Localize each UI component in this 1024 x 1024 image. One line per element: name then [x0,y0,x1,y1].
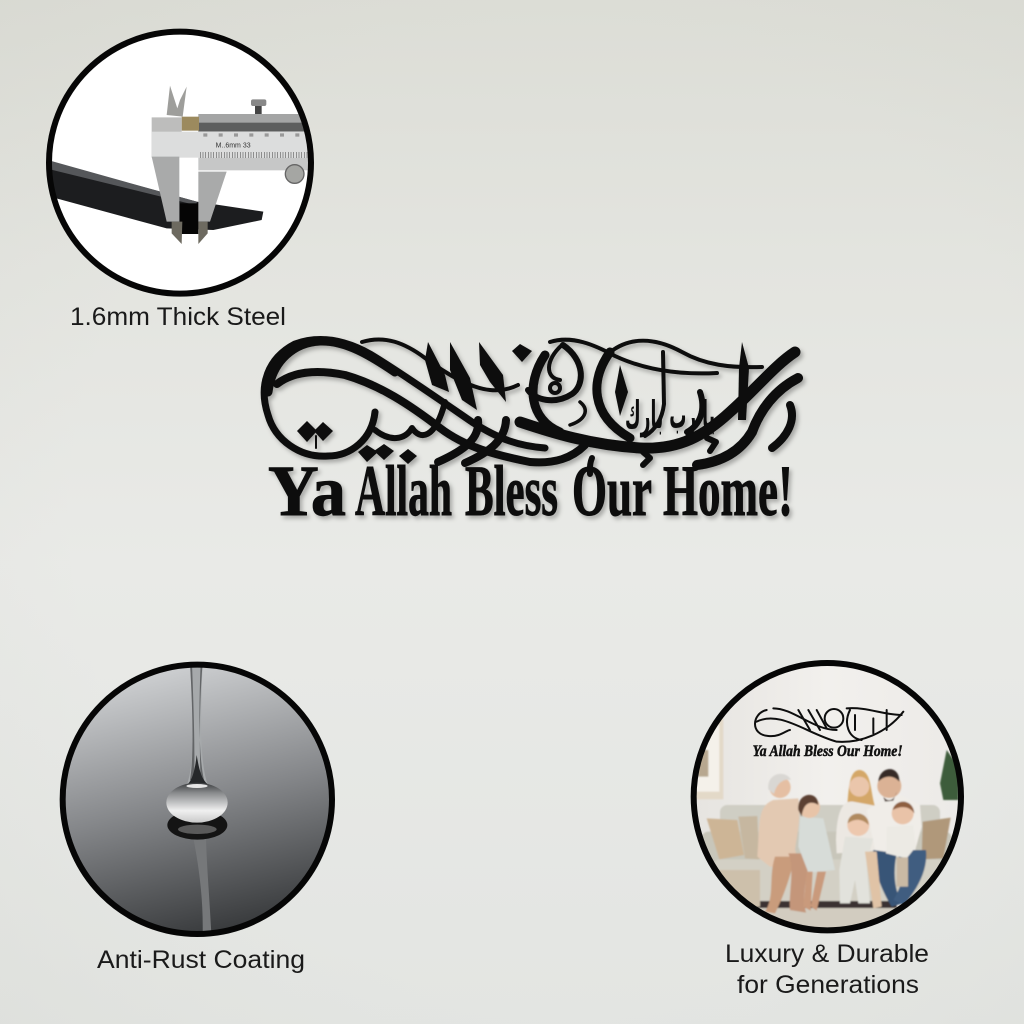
second right stroke [697,378,798,465]
panel: luxury family living room [690,663,967,999]
caption: luxury and durable: Luxury & Durable [725,940,929,968]
tall alif shapes [297,342,749,464]
top right swoops [550,340,717,373]
left arc of ha [533,355,560,432]
english calligraphic text: Ya Allah Bless Our Home: Ya [268,451,346,531]
ha loop [528,345,581,400]
arabic calligraphy flourishes [264,339,798,474]
hook letters [687,392,702,432]
english calligraphic text: Ya Allah Bless Our Home: Our [572,451,652,531]
icon: caliper measuring steel: M..6mm 33 [216,143,251,150]
photo: family on sofa beneath wall art [690,663,967,937]
caption: luxury and durable: for Generations [737,971,919,999]
panel: thick steel caliper [49,31,312,331]
right curl [772,405,792,448]
panel: central calligraphy wall art [264,339,798,531]
caption: thick steel: 1.6mm Thick Steel [70,303,286,331]
english calligraphic text: Ya Allah Bless Our Home [268,451,793,531]
large arc [597,352,630,438]
caption: luxury and durable [725,940,929,999]
left outer loop [264,339,545,456]
mini wall art: Ya Allah Bless Our Home! [753,743,903,760]
top thin line [362,339,518,390]
thick top of the loop [268,341,395,392]
panel: anti-rust coating [63,663,332,974]
middle curves [438,420,478,462]
inner swoop [277,372,585,462]
hamza [570,402,585,425]
english calligraphic text: Ya Allah Bless Our Home: Allah [355,451,452,531]
icon: caliper measuring steel [49,31,312,294]
main thick baseline [520,352,795,448]
english calligraphic text: Ya Allah Bless Our Home: Bless [465,451,558,531]
icon: water droplet on steel [63,663,332,934]
panel: central calligraphy wall art: يا رب بارك [625,393,715,437]
english calligraphic text: Ya Allah Bless Our Home: Home! [663,451,793,531]
mini wall art [753,708,903,760]
caption: anti-rust coating: Anti-Rust Coating [97,946,305,974]
